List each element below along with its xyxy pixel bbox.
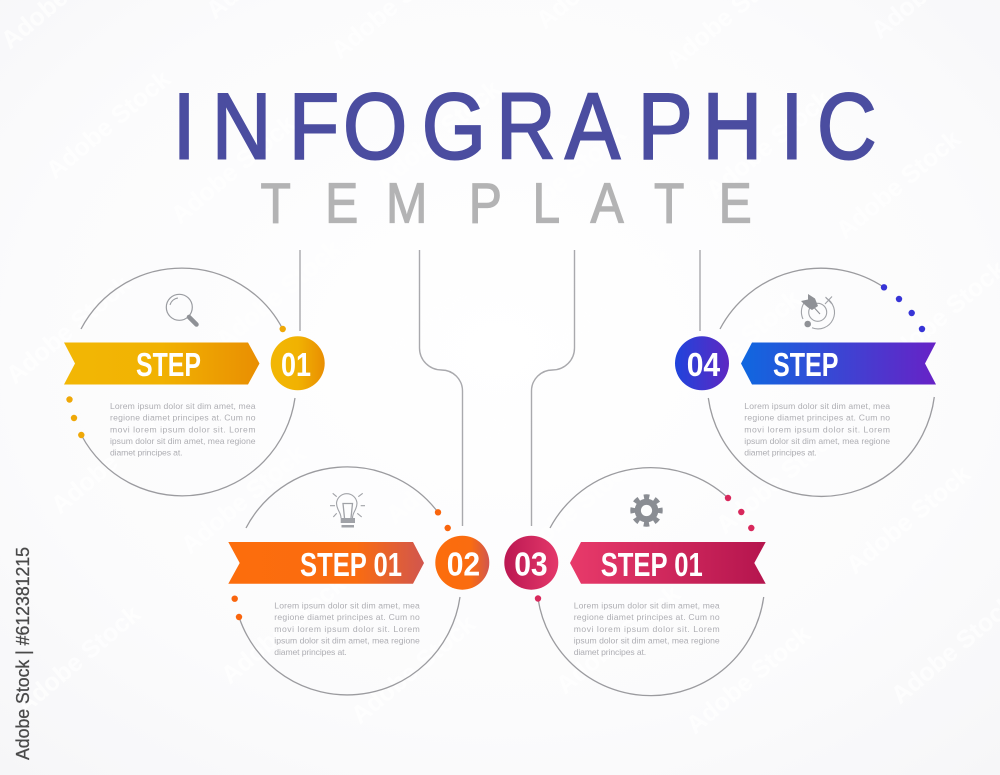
watermark pattern: Adobe Stock [211,235,346,355]
text block: step 02 [274,600,420,657]
banner: step 01: STEP [136,346,201,383]
ring: step 01 [81,268,295,496]
watermark pattern: Adobe Stock [671,285,806,405]
watermark pattern: Adobe Stock [216,570,351,690]
ring: step 02 [239,467,460,695]
text block: step 04: Lorem ipsum dolor sit dim amet, mea [744,401,890,411]
watermark pattern: Adobe Stock [41,65,176,185]
watermark pattern: Adobe Stock [551,580,686,700]
panel: step 02 [228,467,489,695]
watermark pattern: Adobe Stock [336,280,471,400]
text block: step 03: ipsum dolor sit dim amet, mea regione [574,636,720,646]
watermark pattern: Adobe Stock [701,85,836,205]
dots: step 02 [232,509,451,620]
text block: step 02: movi lorem ipsum dolor sit. Lorem [274,624,420,634]
watermark pattern: Adobe Stock [541,245,676,365]
number badge: 03: 03 [514,546,548,582]
connector lines from title to steps [300,250,700,526]
dots: step 03 [535,495,754,602]
text block: step 04 [744,401,890,458]
text block: step 03 [574,600,720,657]
watermark pattern: Adobe Stock [346,610,481,730]
number badge: 04: 04 [687,346,721,383]
stock id caption: Adobe Stock | #612381215 [13,547,33,760]
watermark pattern: Adobe Stock [841,460,976,580]
text block: step 03: Lorem ipsum dolor sit dim amet, mea [574,600,720,610]
watermark pattern: Adobe Stock [11,600,146,720]
text block: step 02: ipsum dolor sit dim amet, mea regione [274,636,420,646]
panel: step 04 [675,268,936,496]
title: INFOGRAPHIC: INFOGRAPHIC [173,74,877,179]
text block: step 01 [110,401,256,458]
text block: step 04: ipsum dolor sit dim amet, mea regione [744,436,890,446]
text block: step 02: regione diamet principes at. Cum no [274,612,420,622]
subtitle: TEMPLATE: TEMPLATE [261,173,752,235]
watermark pattern: Adobe Stock [371,75,506,195]
dots: step 04 [881,284,925,332]
ring: step 04 [708,268,934,496]
number badge: 04 [675,336,729,390]
watermark pattern: Adobe Stock [1,270,136,390]
text block: step 04: diamet principes at. [744,448,817,458]
number badge: 01 [271,336,325,390]
number badge: 03 [504,536,558,590]
banner: step 03: STEP 01 [601,546,703,583]
text block: step 02: diamet principes at. [274,647,347,657]
text block: step 04: regione diamet principes at. Cum no [744,413,890,423]
watermark pattern: Adobe Stock [381,410,516,530]
banner: step 01 [64,342,260,384]
text block: step 01: movi lorem ipsum dolor sit. Lorem [110,424,256,434]
banner: step 02: STEP 01 [300,546,402,583]
number badge: 02 [435,536,489,590]
ring: step 03 [538,468,764,696]
text block: step 03: movi lorem ipsum dolor sit. Lorem [574,624,720,634]
watermark pattern: Adobe Stock [681,620,816,740]
watermark pattern: Adobe Stock [166,110,301,230]
text block: step 03: regione diamet principes at. Cum no [574,612,720,622]
watermark pattern: Adobe Stock [711,420,846,540]
text block: step 01: regione diamet principes at. Cum no [110,413,256,423]
watermark pattern: Adobe Stock [46,400,181,520]
icon: light bulb [330,493,365,528]
watermark pattern: Adobe Stock [496,120,631,240]
banner: step 02 [228,542,424,584]
banner: step 04 [741,342,936,384]
watermark pattern: Adobe Stock [176,440,311,560]
dots: step 01 [66,326,286,438]
text block: step 01: Lorem ipsum dolor sit dim amet, mea [110,401,256,411]
number badge: 01: 01 [281,346,311,383]
banner: step 03 [570,542,766,584]
text block: step 02: Lorem ipsum dolor sit dim amet, mea [274,600,420,610]
watermark pattern: Adobe Stock [506,450,641,570]
banner: step 04: STEP [773,346,838,383]
panel: step 03 [504,468,766,696]
icon: magnifier [166,294,196,324]
text block: step 03: diamet principes at. [574,647,646,657]
text block: step 01: ipsum dolor sit dim amet, mea regione [110,436,256,446]
panel: step 01 [64,268,325,496]
icon: target with dart [801,294,834,329]
text block: step 04: movi lorem ipsum dolor sit. Lorem [744,424,890,434]
number badge: 02: 02 [447,546,480,582]
watermark pattern: Adobe Stock [831,125,966,245]
text block: step 01: diamet principes at. [110,448,182,458]
icon: gear [633,497,660,524]
